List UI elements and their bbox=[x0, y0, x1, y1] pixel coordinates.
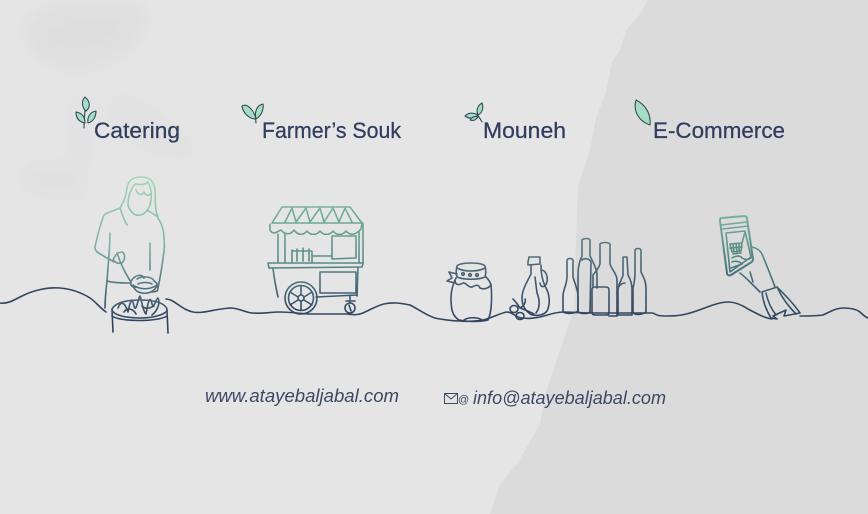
heading: Mouneh bbox=[465, 103, 566, 143]
illustration: souk cart bbox=[268, 207, 363, 314]
icon: shopping cart bbox=[730, 232, 745, 254]
illustration: bottles bbox=[563, 238, 646, 316]
email contact: info@atayebaljabal.com bbox=[473, 388, 666, 408]
illustration: woman cooking bbox=[95, 177, 168, 333]
heading: Catering: Catering bbox=[94, 118, 180, 143]
icon: olives bbox=[510, 299, 534, 320]
background torn shape bbox=[490, 0, 868, 514]
icon: Farmer's Souk leaves bbox=[242, 104, 263, 123]
background leaf shadow bbox=[15, 0, 200, 220]
icon: E-Commerce leaf bbox=[635, 100, 650, 125]
icon: envelope bbox=[444, 394, 458, 404]
heading: Farmer's Souk bbox=[242, 104, 402, 143]
website: www.atayebaljabal.com bbox=[205, 386, 399, 406]
heading: Catering bbox=[76, 97, 180, 143]
illustration: olive oil bottle bbox=[510, 257, 549, 320]
email contact: @ bbox=[458, 394, 469, 406]
heading: Mouneh: Mouneh bbox=[483, 118, 566, 143]
illustration: mouneh jar bbox=[447, 263, 492, 322]
icon: Mouneh leaves bbox=[465, 103, 483, 122]
heading: E-Commerce: E-Commerce bbox=[653, 118, 785, 143]
wavy ground line bbox=[0, 288, 868, 321]
illustration: hand holding phone bbox=[720, 216, 800, 319]
heading: Farmer's Souk: Farmer’s Souk bbox=[262, 118, 402, 143]
heading: E-Commerce bbox=[635, 100, 785, 143]
icon: Catering leaves bbox=[76, 97, 96, 128]
